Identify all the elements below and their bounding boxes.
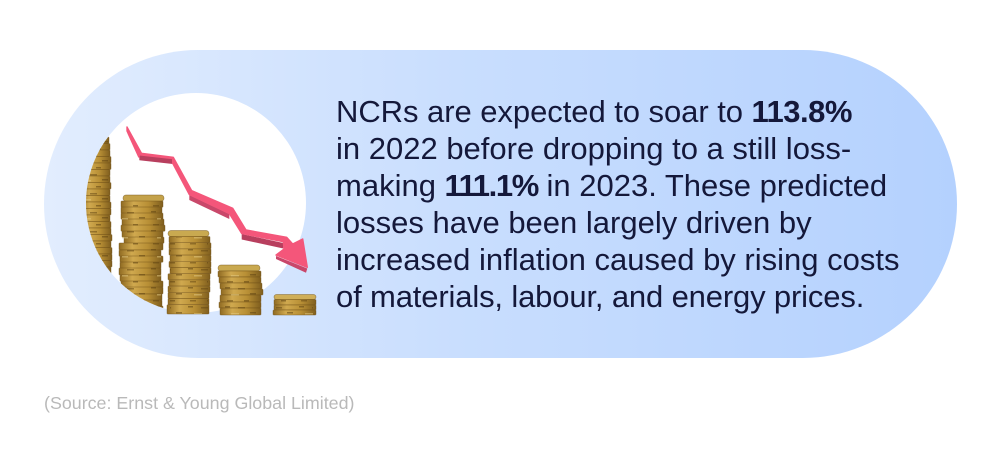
text block: NCR forecast: of materials, labour, and energy prices.: [336, 279, 864, 314]
illustration: coins and falling arrow: [86, 93, 316, 316]
coin stack 3: [167, 230, 211, 314]
coin stack 1: [86, 136, 112, 274]
coin stack 4: [218, 265, 263, 315]
arrow: falling trend: [127, 127, 307, 273]
text block: NCR forecast: making 111.1% in 2023. These predicted: [336, 168, 887, 203]
text block: NCR forecast: increased inflation caused by rising costs: [336, 242, 899, 277]
coin stack 2: [119, 195, 165, 315]
icon: white circle: [86, 93, 306, 313]
text block: NCR forecast: losses have been largely driven by: [336, 205, 812, 240]
text block: NCR forecast: in 2022 before dropping to a still loss-: [336, 131, 851, 166]
source note: (Source: Ernst & Young Global Limited): [44, 393, 354, 413]
text block: NCR forecast: [336, 94, 899, 314]
text block: NCR forecast: NCRs are expected to soar to 113.8%: [336, 94, 852, 129]
coin stack 5: [273, 294, 316, 315]
panel: rounded pill background: [44, 50, 957, 358]
